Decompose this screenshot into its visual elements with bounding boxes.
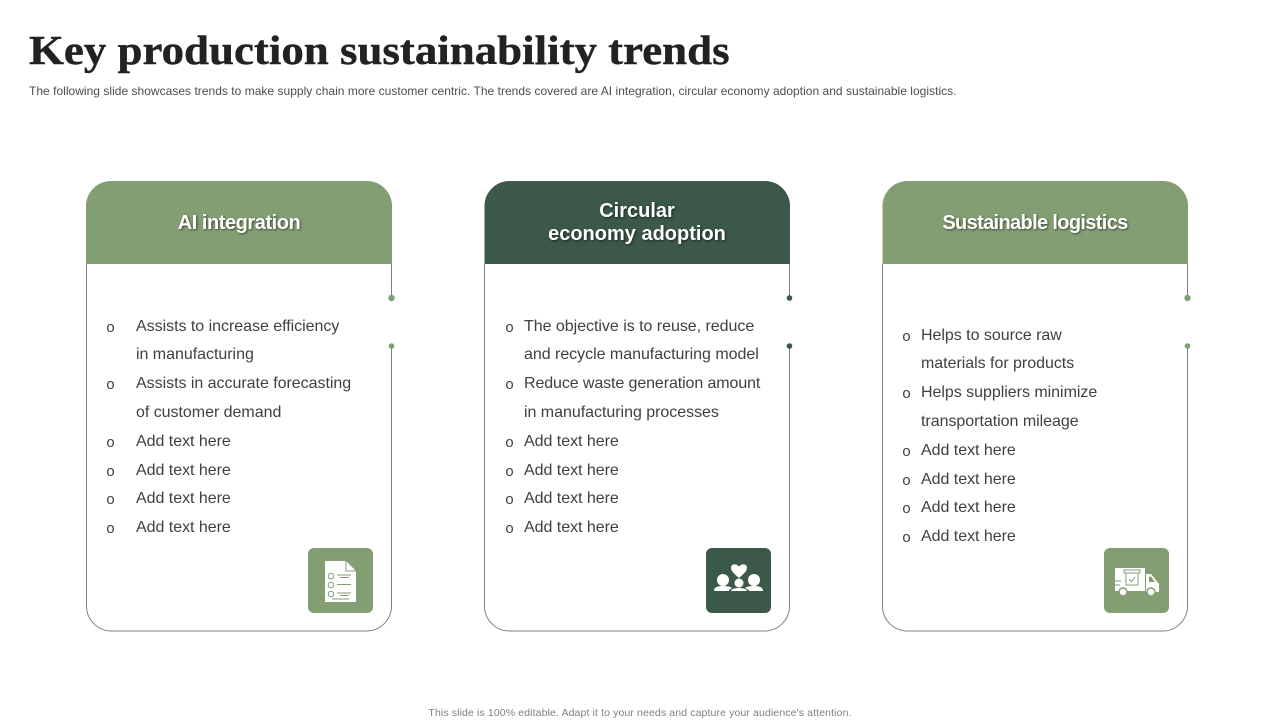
bullet list: Sustainable logistics: o: [902, 473, 911, 490]
icon: family with heart: [706, 548, 771, 613]
bullet list: Sustainable logistics: o: [902, 329, 911, 346]
bullet list: Circular economy adoption: Reduce waste generation amount: [524, 375, 760, 392]
bullet list: Sustainable logistics: o: [902, 501, 911, 518]
bullet list: AI integration: in manufacturing: [136, 346, 254, 363]
bullet list: Circular economy adoption: o: [505, 492, 514, 509]
bullet list: Circular economy adoption: in manufacturing processes: [524, 404, 719, 421]
bullet list: Sustainable logistics: o: [902, 444, 911, 461]
heading: Sustainable logistics: Sustainable logistics: [942, 212, 1128, 234]
bullet list: Circular economy adoption: [505, 318, 760, 538]
bullet list: AI integration: of customer demand: [136, 404, 281, 421]
bullet list: Sustainable logistics: Add text here: [921, 499, 1016, 516]
bullet list: Sustainable logistics: Helps to source raw: [921, 327, 1062, 344]
subtitle: The following slide showcases trends to make supply chain more customer centric. The trends covered are AI integration, circular economy adoption and sustainable logistics.: [29, 84, 957, 98]
icon: delivery truck: [1104, 548, 1169, 613]
bullet list: Circular economy adoption: o: [505, 435, 514, 452]
bullet list: AI integration: Assists in accurate forecasting: [136, 375, 351, 392]
bullet list: Sustainable logistics: Add text here: [921, 471, 1016, 488]
bullet list: Sustainable logistics: materials for products: [921, 355, 1074, 372]
bullet list: Sustainable logistics: Add text here: [921, 442, 1016, 459]
bullet list: Sustainable logistics: [902, 327, 1097, 547]
bullet list: AI integration: Add text here: [136, 519, 231, 536]
bullet list: Sustainable logistics: Helps suppliers minimize: [921, 384, 1097, 401]
bullet list: Circular economy adoption: o: [505, 320, 514, 337]
bullet list: AI integration: o: [106, 435, 115, 452]
bullet list: AI integration: o: [106, 492, 115, 509]
heading: Circular economy adoption: Circular: [599, 200, 675, 222]
bullet list: AI integration: [106, 318, 351, 538]
bullet list: Circular economy adoption: Add text here: [524, 462, 619, 479]
title: Key production sustainability trends: [29, 27, 730, 73]
bullet list: Sustainable logistics: o: [902, 530, 911, 547]
icon: checklist document: [308, 548, 373, 613]
bullet list: AI integration: Assists to increase efficiency: [136, 318, 339, 335]
bullet list: Circular economy adoption: The objective is to reuse, reduce: [524, 318, 754, 335]
heading: AI integration: AI integration: [178, 212, 300, 234]
bullet list: AI integration: o: [106, 377, 115, 394]
footer note: This slide is 100% editable. Adapt it to your needs and capture your audience's attention.: [428, 707, 852, 719]
bullet list: Sustainable logistics: o: [902, 386, 911, 403]
bullet list: Circular economy adoption: o: [505, 377, 514, 394]
bullet list: AI integration: o: [106, 464, 115, 481]
bullet list: Circular economy adoption: and recycle manufacturing model: [524, 346, 759, 363]
bullet list: Sustainable logistics: Add text here: [921, 528, 1016, 545]
bullet list: AI integration: o: [106, 521, 115, 538]
bullet list: Circular economy adoption: Add text here: [524, 490, 619, 507]
bullet list: AI integration: Add text here: [136, 462, 231, 479]
bullet list: AI integration: Add text here: [136, 490, 231, 507]
bullet list: Circular economy adoption: o: [505, 521, 514, 538]
bullet list: Circular economy adoption: Add text here: [524, 433, 619, 450]
heading: Circular economy adoption: [548, 200, 726, 246]
bullet list: AI integration: Add text here: [136, 433, 231, 450]
bullet list: AI integration: o: [106, 320, 115, 337]
bullet list: Circular economy adoption: Add text here: [524, 519, 619, 536]
bullet list: Sustainable logistics: transportation mileage: [921, 413, 1079, 430]
heading: Circular economy adoption: economy adoption: [548, 223, 726, 245]
bullet list: Circular economy adoption: o: [505, 464, 514, 481]
